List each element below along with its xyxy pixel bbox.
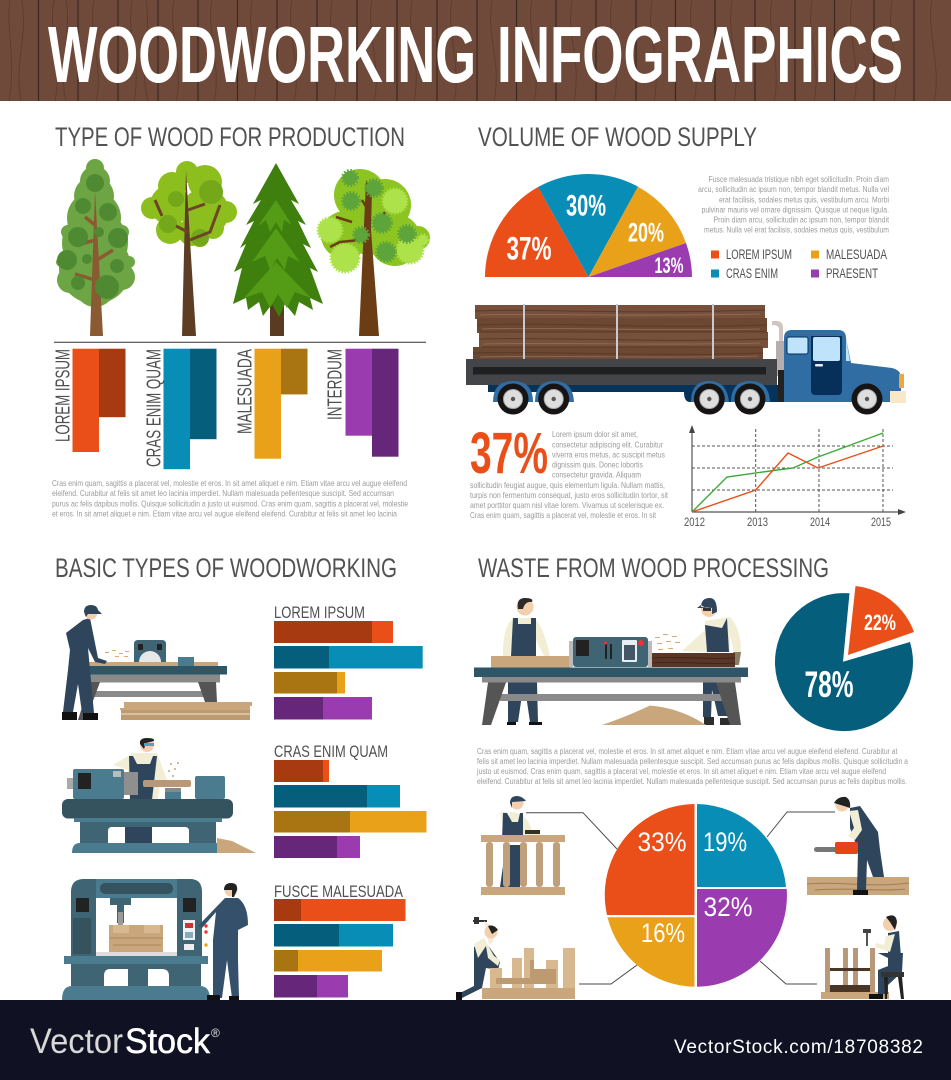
logs [473,305,768,360]
label: interdum: INTERDUM [324,349,346,420]
text block: supply paragraph: pulvinar mauris vel ornare dignissim. Quisque ut neque ligula. [702,204,889,214]
footer logo: VectorStock [30,1022,220,1061]
footer image id: VectorStock.com/18708382 [674,1037,923,1058]
icon: tree 1 [56,159,135,336]
label: cras enim quam: CRAS ENIM QUAM [144,349,166,467]
wheel arches and wheels [493,381,887,402]
text block: statistic description: viverra eros metus, ac suscipit metus [552,450,665,460]
text block: waste caption [476,746,908,786]
text block: supply paragraph: arcu, sollicitudin ac ipsum non, tempor blandit metus. Nulla vel [698,184,889,194]
connector lines [526,812,835,984]
text block: supply paragraph: erat facilisis, sodales metus quis, vestibulum arcu. Morbi [719,194,889,204]
workpieces and machine [491,656,570,668]
chart: processing pie: 16% [641,918,685,948]
legend: supply: CRAS ENIM [726,266,778,281]
heading: type of wood: TYPE OF WOOD FOR PRODUCTION [55,122,405,152]
bar group: lorem ipsum [274,603,423,720]
text block: statistic description: Lorem ipsum dolor sit amet, [552,429,638,439]
text block: supply paragraph: Fusce malesuada tristique nibh eget sollicitudin. Proin diam [708,174,889,184]
chart: waste pie: 22% [864,610,896,635]
legend: supply: MALESUADA [826,247,887,262]
heading: volume of wood supply: VOLUME OF WOOD SUPPLY [478,122,757,152]
big statistic: 37%: 37% [470,421,548,486]
label: lorem ipsum: LOREM IPSUM [52,349,74,442]
left worker [508,682,538,722]
text block: statistic description: amet porttitor quam nisl vitae lorem. Vivamus ut scelerisque ex. [470,500,664,510]
bar group: fusce malesuada [274,882,406,998]
illustration: waste processing workers [474,598,748,725]
illustration: carpenter with hammer [456,917,575,1000]
chart: semicircle pie [485,174,692,278]
axis line for wood types [54,342,426,343]
chart: semicircle pie: 37% [506,230,552,266]
bar chart: wood types [52,349,398,469]
bar group: cras enim quam: CRAS ENIM QUAM [274,742,388,761]
chart: processing pie [605,804,787,987]
chart: semicircle pie: 30% [566,190,606,222]
header banner: wood planks [0,0,951,101]
text block: wood types caption [52,478,408,518]
line chart [684,425,906,529]
text block: supply paragraph [698,174,889,234]
line chart: 2012 [684,517,705,529]
bar group: cras enim quam [274,742,426,858]
text block: statistic description: sollicitudin feugiat augue, quis elementum ligula. Nullam mattis, [470,480,665,490]
icon: pine tree [233,163,323,336]
text block: statistic description: turpis non fermentum consequat, justo eros sollicitudin tortor, sit [470,490,668,500]
exhaust [772,321,783,342]
line chart: 2013 [747,517,768,529]
chart: waste pie: 78% [804,664,854,705]
footer bar [0,1000,951,1080]
illustration: logging truck [466,304,906,414]
illustration: chainsaw worker [807,797,909,895]
line chart: 2014 [810,517,830,529]
text block: wood types caption: et eros. In sit amet aliquet e nim. Etiam vitae arcu vel augue eleifend eleifend. Curabitur at felis sit amet leo lacinia [52,508,397,518]
text block: statistic description: Cras enim quam, sagittis a placerat vel, molestie et eros. In sit [470,510,656,520]
text block: supply paragraph: Proin diam arcu, sollicitudin ac ipsum non, tempor blandit [714,214,889,224]
illustration: lathe worker [62,738,256,853]
text block: statistic description: dignissim quis. Donec lobortis [552,460,643,470]
label: malesuada: MALESUADA [234,349,256,434]
illustration: stool worker [821,915,904,999]
chart: processing pie: 19% [703,827,747,857]
table [474,668,748,677]
chart: processing pie: 32% [704,892,752,922]
icon: tree 2 [141,161,237,336]
illustration: table saw worker [62,605,252,720]
icon: tree 4 [318,169,430,336]
bar group: lorem ipsum: LOREM IPSUM [274,603,365,622]
heading: basic types of woodworking: BASIC TYPES OF WOODWORKING [55,553,397,583]
chart: waste pie [775,586,914,731]
footer logo: VectorStock: Stock [125,1022,210,1061]
illustration: cnc machine worker [62,879,248,1000]
footer logo: VectorStock: ® [211,1026,220,1040]
right worker [703,680,728,717]
text block: statistic description: consectetur gravida. Aliquam [552,470,641,480]
bar group: fusce malesuada: FUSCE MALESUADA [274,882,404,901]
text block: supply paragraph: metus. Nulla vel erat facilisis, sodales metus quis, vestibulum [704,224,889,234]
legend: supply: PRAESENT [826,266,878,281]
text block: wood types caption: purus ac felis dapibus mollis. Quisque sollicitudin a justo ut euismod. Cras enim quam, sagittis a placerat vel, molestie [52,498,408,508]
flatbed [466,359,777,385]
illustration: balustrade worker [481,796,565,895]
legend: supply: LOREM IPSUM [726,247,792,262]
text block: statistic description: consectetur adipiscing elit. Curabitur [552,440,663,450]
line chart: 2015 [871,517,891,529]
text block: wood types caption: eleifend. Curabitur at felis sit amet leo lacinia imperdiet. Nullam malesuada pellentesque suscipit. Sed accumsan [52,488,394,498]
lumber stack [120,702,252,710]
chart: processing pie: 33% [638,827,686,857]
chart: semicircle pie: 20% [628,218,664,248]
chassis and cab [488,385,778,402]
text block: wood types caption: Cras enim quam, sagittis a placerat vel, molestie et eros. In sit amet aliquet e nim. Etiam vitae arcu vel augue eleifend [52,478,407,488]
footer logo: VectorStock: Vector [30,1022,123,1061]
chart: semicircle pie: 13% [654,253,684,278]
title: WOODWORKING [48,10,476,99]
text block: statistic description [470,429,668,520]
legend: supply [711,247,887,281]
heading: waste from wood processing: WASTE FROM WOOD PROCESSING [478,553,829,583]
